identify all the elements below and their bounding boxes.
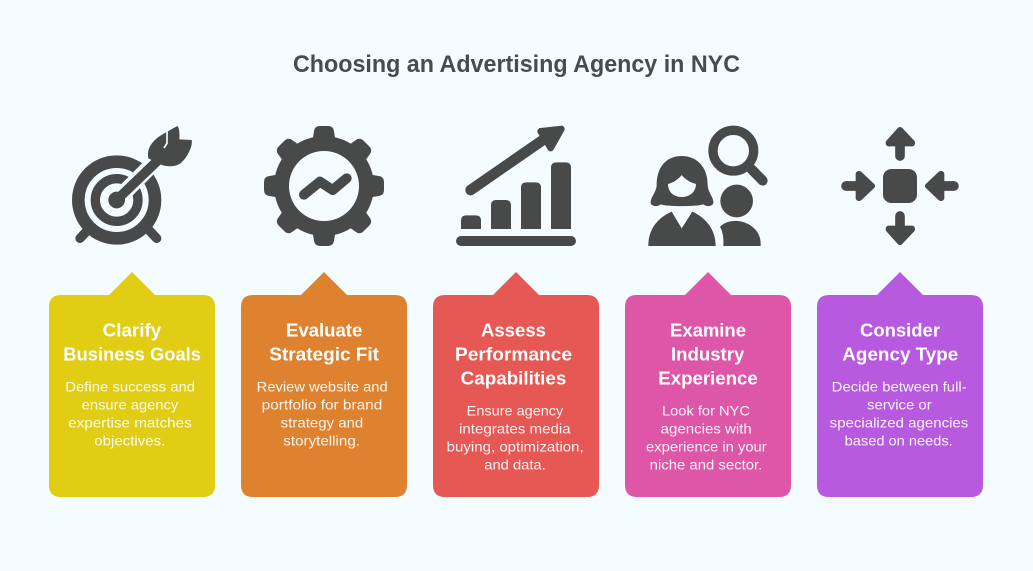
heading: Examine Industry Experience: Industry — [671, 344, 744, 364]
heading: Clarify Business Goals: Business Goals — [63, 344, 201, 364]
text: Examine description: Look for NYC — [662, 402, 750, 418]
icon: arrows pointing to center square — [846, 130, 954, 242]
heading: Consider Agency Type: Agency Type — [842, 344, 958, 364]
icon: gear with trend line — [264, 126, 384, 246]
text: Consider description — [830, 378, 968, 448]
text: Evaluate description: storytelling. — [283, 432, 360, 448]
text: Clarify description — [65, 378, 195, 448]
icon: target with dart — [78, 126, 192, 238]
heading: Consider Agency Type — [842, 320, 958, 364]
heading: Assess Performance Capabilities: Performance — [455, 344, 572, 364]
panel: Consider Agency Type — [817, 272, 983, 497]
text: Consider description: Decide between full- — [832, 378, 967, 394]
text: Assess description: Ensure agency — [467, 402, 563, 418]
text: Examine description: agencies with — [661, 420, 752, 436]
text: Examine description — [646, 402, 767, 472]
heading: Consider Agency Type: Consider — [860, 320, 940, 340]
icon: people with magnifying glass — [648, 130, 763, 246]
text: Clarify description: objectives. — [94, 432, 165, 448]
heading: Evaluate Strategic Fit: Evaluate — [286, 320, 362, 340]
title: Choosing an Advertising Agency in NYC — [293, 51, 740, 78]
text: Clarify description: Define success and — [65, 378, 195, 394]
panel: Examine Industry Experience — [625, 272, 791, 497]
panel: Assess Performance Capabilities — [433, 272, 599, 497]
text: Consider description: specialized agencies — [830, 414, 968, 430]
text: Evaluate description: Review website and — [257, 378, 388, 394]
heading: Assess Performance Capabilities: Assess — [481, 320, 546, 340]
text: Evaluate description — [257, 378, 388, 448]
text: Assess description: integrates media — [459, 420, 571, 436]
heading: Clarify Business Goals: Clarify — [103, 320, 161, 340]
panel: Clarify Business Goals — [49, 272, 215, 497]
heading: Evaluate Strategic Fit: Strategic Fit — [269, 344, 379, 364]
text: Evaluate description: portfolio for brand — [262, 396, 382, 412]
text: Evaluate description: strategy and — [281, 414, 363, 430]
heading: Examine Industry Experience: Experience — [658, 368, 758, 388]
heading: Examine Industry Experience — [658, 320, 758, 388]
text: Consider description: service or — [867, 396, 932, 412]
heading: Evaluate Strategic Fit — [269, 320, 379, 364]
heading: Assess Performance Capabilities: Capabilities — [461, 368, 566, 388]
text: Examine description: experience in your — [646, 438, 767, 454]
text: Assess description: and data. — [484, 456, 546, 472]
heading: Assess Performance Capabilities — [455, 320, 572, 388]
text: Assess description: buying, optimization, — [447, 438, 584, 454]
icon: rising bar chart with arrow — [456, 129, 576, 246]
panel: Evaluate Strategic Fit — [241, 272, 407, 497]
text: Consider description: based on needs. — [845, 432, 953, 448]
text: Assess description — [447, 402, 584, 472]
text: Examine description: niche and sector. — [650, 456, 762, 472]
text: Clarify description: ensure agency — [82, 396, 178, 412]
heading: Examine Industry Experience: Examine — [670, 320, 746, 340]
heading: Clarify Business Goals — [63, 320, 201, 364]
text: Clarify description: expertise matches — [68, 414, 192, 430]
